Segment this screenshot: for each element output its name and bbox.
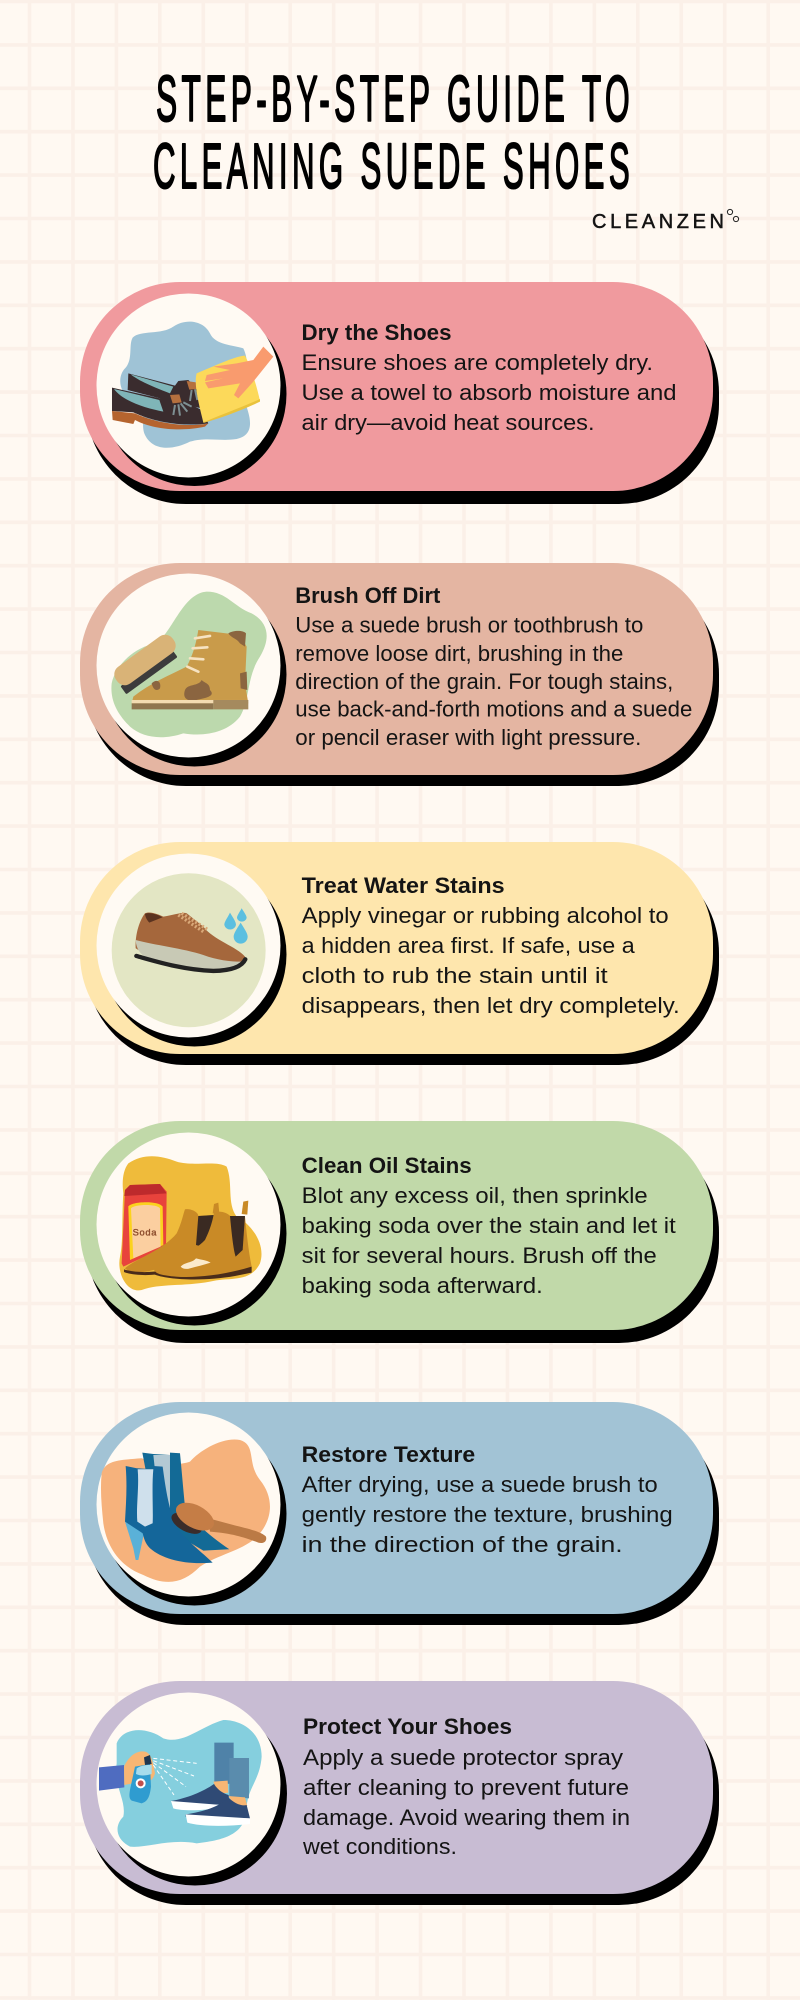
icon: loafers wiped with towel: [112, 322, 273, 448]
panel: Treat Water Stains: cloth to rub the stain until it: [302, 963, 609, 988]
panel: Restore Texture: in the direction of the grain.: [302, 1532, 623, 1557]
panel: Clean Oil Stains: Clean Oil Stains: [302, 1153, 472, 1178]
title: [153, 62, 634, 202]
panel: Protect Your Shoes: Protect Your Shoes: [303, 1714, 512, 1739]
icon: sneaker with water drops: [112, 873, 266, 1027]
panel: Brush Off Dirt: or pencil eraser with light pressure.: [295, 725, 641, 750]
panel: Treat Water Stains: a hidden area first. If safe, use a: [302, 933, 635, 958]
panel: Protect Your Shoes: damage. Avoid wearing them in: [303, 1805, 630, 1830]
panel: Restore Texture: After drying, use a suede brush to: [302, 1472, 658, 1497]
panel: Dry the Shoes: [80, 282, 719, 504]
panel: Restore Texture: Restore Texture: [302, 1442, 475, 1467]
panel: Treat Water Stains: Treat Water Stains: [302, 873, 505, 898]
panel: Protect Your Shoes: wet conditions.: [302, 1834, 457, 1859]
panel: Clean Oil Stains: Blot any excess oil, then sprinkle: [302, 1183, 648, 1208]
panel: Treat Water Stains: Apply vinegar or rubbing alcohol to: [302, 903, 669, 928]
panel: Protect Your Shoes: Apply a suede protector spray: [303, 1745, 624, 1770]
logo: Cleanzen: CLEANZEN: [592, 211, 724, 233]
panel: Brush Off Dirt: use back-and-forth motions and a suede: [295, 697, 692, 722]
panel: Dry the Shoes: Ensure shoes are completely dry.: [302, 350, 653, 375]
panel: Treat Water Stains: [80, 842, 719, 1065]
panel: Protect Your Shoes: [80, 1681, 719, 1905]
panel: Dry the Shoes: Dry the Shoes: [302, 320, 452, 345]
panel: Brush Off Dirt: [80, 563, 719, 786]
panel: Dry the Shoes: Use a towel to absorb moisture and: [302, 380, 676, 405]
panel: Brush Off Dirt: direction of the grain. For tough stains,: [295, 669, 673, 694]
icon: boot and brush: [111, 592, 267, 737]
panel: Clean Oil Stains: [80, 1121, 719, 1343]
panel: Dry the Shoes: air dry—avoid heat sources.: [302, 410, 594, 435]
icon: blue boots and brush: [101, 1439, 270, 1582]
icon: baking soda box and boots: [119, 1156, 261, 1290]
panel: Clean Oil Stains: sit for several hours. Brush off the: [302, 1243, 657, 1268]
panel: Restore Texture: gently restore the texture, brushing: [302, 1502, 673, 1527]
panel: Treat Water Stains: disappears, then let dry completely.: [302, 993, 680, 1018]
panel: Brush Off Dirt: remove loose dirt, brushing in the: [295, 641, 623, 666]
panel: Brush Off Dirt: Brush Off Dirt: [295, 583, 441, 608]
panel: Clean Oil Stains: baking soda over the stain and let it: [302, 1213, 676, 1238]
icon: hand spraying sneakers: [99, 1720, 262, 1847]
panel: Restore Texture: [80, 1402, 719, 1625]
icon: baking soda box and boots: Soda: [133, 1227, 157, 1237]
panel: Clean Oil Stains: baking soda afterward.: [302, 1273, 543, 1298]
panel: Protect Your Shoes: after cleaning to prevent future: [303, 1775, 629, 1800]
panel: Brush Off Dirt: Use a suede brush or toothbrush to: [295, 613, 643, 638]
